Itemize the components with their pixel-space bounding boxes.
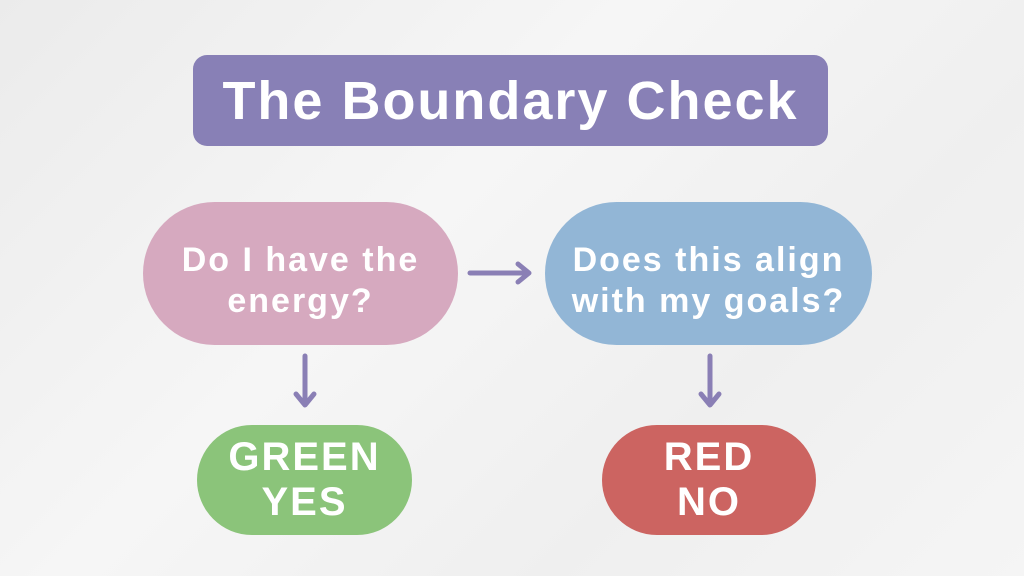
arrow: right — [468, 262, 532, 284]
question: goals: Does this align — [573, 240, 844, 278]
answer: red no: RED — [664, 435, 754, 479]
answer: red no: NO — [677, 480, 741, 524]
arrow: down right — [698, 354, 722, 408]
question: goals — [545, 202, 872, 345]
question: energy: energy? — [227, 282, 374, 320]
arrow: down left — [294, 354, 316, 408]
answer: green yes — [197, 425, 412, 535]
answer: green yes: GREEN — [228, 435, 381, 479]
answer: green yes: YES — [261, 480, 348, 524]
question: energy — [143, 202, 458, 345]
question: goals: with my goals? — [572, 282, 845, 320]
answer: red no — [602, 425, 816, 535]
title — [193, 55, 828, 146]
title: The Boundary Check — [222, 70, 799, 130]
question: energy: Do I have the — [182, 240, 419, 278]
